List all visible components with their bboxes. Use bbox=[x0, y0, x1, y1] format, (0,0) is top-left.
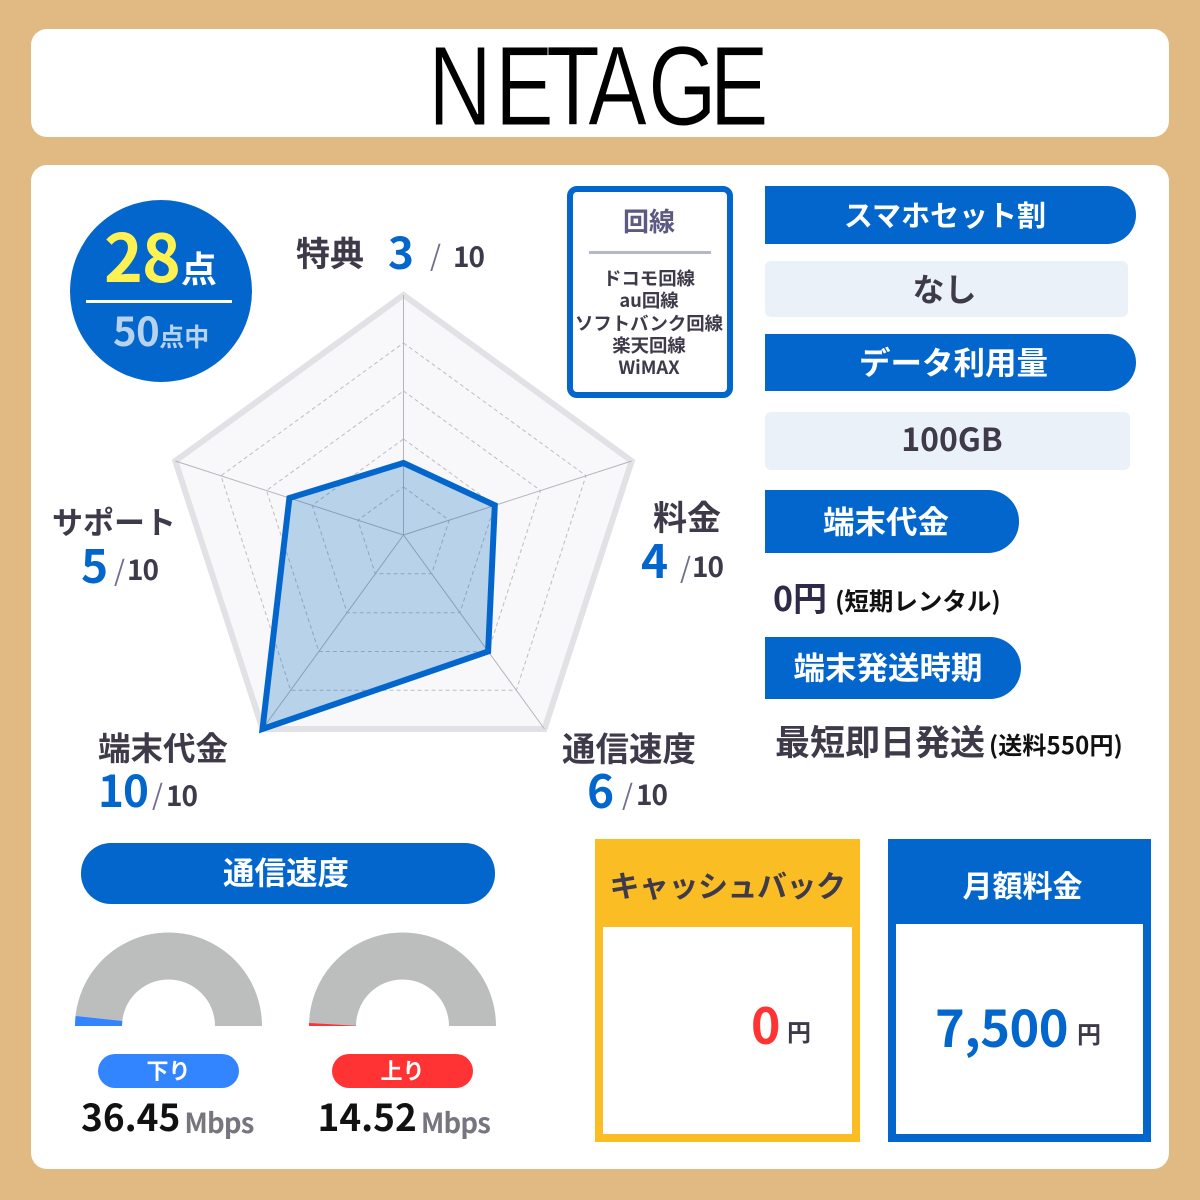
panel: monthly fee bbox=[888, 839, 1151, 1142]
cashback heading bbox=[595, 839, 860, 927]
panel: cashback bbox=[595, 839, 860, 1142]
value: なし: なし bbox=[912, 265, 976, 311]
cashback amount bbox=[751, 987, 811, 1059]
upload speed: 14.52Mbps bbox=[318, 1088, 490, 1142]
cashback amount: 円 bbox=[787, 1013, 811, 1048]
heading: 通信速度: 通信速度 bbox=[223, 848, 349, 894]
heading: 通信速度 bbox=[81, 843, 495, 904]
radar label: 端末代金: 10 bbox=[98, 756, 148, 820]
radar label: サポート bbox=[52, 498, 176, 597]
radar label: 料金: 4 bbox=[641, 526, 668, 592]
回線 list: 楽天回線 bbox=[612, 332, 686, 358]
heading: スマホセット割: スマホセット割 bbox=[844, 193, 1046, 235]
radar label: 料金: 料金 bbox=[653, 491, 721, 540]
radar label: 端末代金: 端末代金 bbox=[98, 723, 228, 770]
回線 list bbox=[575, 265, 723, 380]
radar data polygon bbox=[262, 463, 495, 729]
heading: 端末発送時期: 端末発送時期 bbox=[793, 643, 982, 689]
value: 100GB: 100GB bbox=[901, 415, 1003, 461]
回線 divider bbox=[589, 251, 711, 254]
cashback heading: キャッシュバック bbox=[610, 862, 846, 906]
radar label: 特典 bbox=[296, 218, 484, 282]
panel: 回線 bbox=[567, 186, 733, 398]
radar axes bbox=[175, 295, 632, 729]
radar label: 端末代金 bbox=[98, 723, 228, 820]
radar label: 特典: 特典 bbox=[296, 227, 364, 276]
回線 list: ドコモ回線 bbox=[603, 265, 695, 291]
radar label: 通信速度 bbox=[562, 722, 696, 822]
回線 heading: 回線 bbox=[623, 202, 675, 239]
heading: 端末代金: 端末代金 bbox=[823, 497, 949, 543]
out of 50: 50点中 bbox=[113, 300, 209, 358]
monthly fee amount: 円 bbox=[1077, 1015, 1101, 1050]
download speed: 36.45Mbps bbox=[81, 1088, 254, 1142]
radar label: サポート: 5 bbox=[81, 531, 108, 597]
radar label: サポート: サポート bbox=[52, 498, 176, 543]
value: なし bbox=[765, 261, 1128, 317]
radar label: 特典: 3 bbox=[388, 218, 414, 282]
tag: 下り bbox=[98, 1054, 239, 1088]
heading: データ利用量: データ利用量 bbox=[859, 338, 1048, 384]
gauge: upload bbox=[309, 932, 496, 1026]
回線 list: WiMAX bbox=[618, 354, 680, 380]
heading: スマホセット割 bbox=[765, 186, 1136, 244]
radar grid rings bbox=[221, 343, 586, 690]
badge divider bbox=[86, 300, 232, 303]
monthly fee heading bbox=[888, 839, 1151, 924]
radar label: 端末代金: / bbox=[152, 774, 163, 814]
monthly fee amount: 7,500 bbox=[935, 988, 1068, 1062]
heading: データ利用量 bbox=[765, 334, 1136, 391]
radar label: サポート: 10 bbox=[127, 549, 158, 589]
radar label: 端末代金: 10 bbox=[166, 775, 197, 815]
score badge bbox=[70, 200, 252, 382]
radar label: 特典: / bbox=[430, 235, 441, 275]
header panel bbox=[31, 29, 1169, 137]
radar label: 料金: 10 bbox=[692, 546, 723, 586]
radar label: 通信速度: / bbox=[622, 774, 633, 814]
radar label: 通信速度: 6 bbox=[587, 756, 614, 822]
monthly fee heading: 月額料金 bbox=[962, 862, 1082, 906]
radar label: サポート: / bbox=[114, 550, 125, 590]
score: 28 points: 28点 bbox=[104, 206, 217, 302]
value: 最短即日発送: 最短即日発送(送料550円) bbox=[775, 715, 1123, 766]
回線 list: au回線 bbox=[619, 287, 679, 313]
heading: 端末発送時期 bbox=[765, 637, 1021, 699]
radar label: 通信速度: 10 bbox=[636, 774, 667, 814]
tag: 下り: 下り bbox=[146, 1054, 190, 1086]
radar label: 通信速度: 通信速度 bbox=[562, 722, 696, 771]
gauge: download bbox=[75, 932, 262, 1026]
main panel bbox=[31, 165, 1169, 1169]
tag: 上り: 上り bbox=[380, 1054, 424, 1086]
回線 list: ソフトバンク回線 bbox=[575, 310, 723, 336]
radar label: 料金: / bbox=[680, 547, 691, 587]
tag: 上り bbox=[332, 1054, 473, 1088]
cashback amount: 0 bbox=[751, 987, 780, 1059]
heading: 端末代金 bbox=[765, 490, 1019, 553]
value: 0円 短期レンタル: 0円 (短期レンタル) bbox=[773, 572, 1001, 621]
value: 100GB bbox=[765, 412, 1130, 470]
radar label: 料金 bbox=[641, 491, 723, 592]
radar background and frame bbox=[175, 295, 632, 729]
radar label: 特典: 10 bbox=[453, 236, 484, 276]
